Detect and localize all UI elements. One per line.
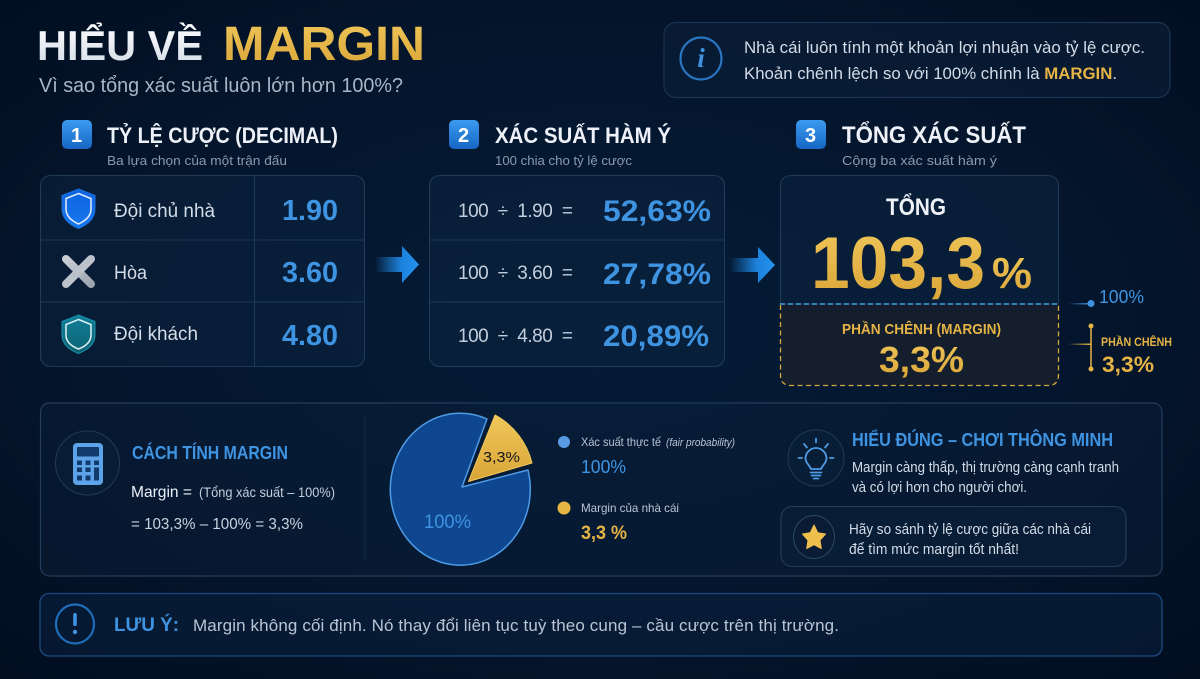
value: draw odds: 3.60 bbox=[282, 257, 338, 289]
panel: total probability bbox=[780, 176, 1060, 386]
explanation text: và có lợi hơn cho người chơi. bbox=[852, 480, 1027, 496]
result row 1: 52,63% bbox=[603, 195, 711, 228]
formula: Margin = bbox=[131, 484, 192, 501]
heading: understand, play smart: HIỂU ĐÚNG – CHƠI THÔNG MINH bbox=[852, 429, 1113, 450]
legend: fair probability: 100% bbox=[581, 457, 626, 477]
title: MARGIN bbox=[223, 18, 425, 71]
100% dashed line bbox=[780, 303, 1060, 305]
tip text: để tìm mức margin tốt nhất! bbox=[849, 542, 1019, 558]
title bbox=[37, 18, 425, 71]
marker: 100% level bbox=[1068, 287, 1144, 307]
info text: Nhà cái luôn tính một khoản lợi nhuận vào tỷ lệ cược. bbox=[744, 38, 1145, 57]
panel: implied probability bbox=[430, 176, 724, 366]
info text: Khoản chênh lệch so với 100% chính là MARGIN. bbox=[744, 64, 1117, 83]
legend: fair probability: Xác suất thực tế bbox=[581, 435, 661, 449]
legend: fair probability: (fair probability) bbox=[666, 437, 735, 449]
step 1 heading: 1 bbox=[71, 125, 82, 147]
tip text: Hãy so sánh tỷ lệ cược giữa các nhà cái bbox=[849, 522, 1091, 538]
pie chart: 3,3% bbox=[483, 449, 520, 466]
margin value: 3,3% bbox=[879, 339, 964, 380]
label: home team: Đội chủ nhà bbox=[114, 201, 215, 222]
panel: odds table bbox=[40, 176, 364, 366]
tip text bbox=[849, 522, 1091, 558]
legend: bookmaker margin: Margin của nhà cái bbox=[581, 501, 679, 515]
legend: bookmaker margin: 3,3 % bbox=[581, 523, 627, 544]
step 3 heading bbox=[796, 120, 1026, 168]
icon: away shield bbox=[62, 315, 95, 354]
tip box bbox=[781, 506, 1126, 566]
panel: calculation and chart bbox=[40, 403, 1162, 576]
legend: bookmaker margin bbox=[558, 501, 679, 544]
result row 3: 20,89% bbox=[603, 320, 709, 353]
explanation text bbox=[852, 460, 1119, 496]
formula row 1: 100 ÷ 1.90 = bbox=[458, 201, 573, 222]
icon: exclamation bbox=[56, 604, 94, 644]
arrow: step 1 to 2 bbox=[375, 246, 419, 283]
total value: % bbox=[992, 249, 1032, 298]
marker: margin bracket bbox=[1068, 324, 1172, 377]
result row 2: 27,78% bbox=[603, 258, 711, 291]
formula row 2: 100 ÷ 3.60 = bbox=[458, 263, 573, 284]
panel: note bbox=[40, 594, 1162, 656]
subtitle: Vì sao tổng xác suất luôn lớn hơn 100%? bbox=[39, 75, 403, 97]
total value: 103,3 bbox=[811, 223, 985, 304]
formula bbox=[131, 484, 335, 533]
formula: = 103,3% – 100% = 3,3% bbox=[131, 516, 303, 533]
pie chart: 100% bbox=[424, 512, 471, 533]
total label: TỔNG bbox=[886, 193, 946, 221]
value: away odds: 4.80 bbox=[282, 320, 338, 352]
step 2 heading: 100 chia cho tỷ lệ cược bbox=[495, 153, 633, 168]
icon: draw cross bbox=[66, 259, 91, 284]
step 1 heading bbox=[62, 120, 338, 168]
arrow: step 2 to 3 bbox=[730, 247, 775, 283]
icon: info bbox=[680, 38, 722, 80]
step 1 heading: Ba lựa chọn của một trận đấu bbox=[107, 153, 287, 168]
heading: how to calculate: CÁCH TÍNH MARGIN bbox=[132, 442, 288, 463]
icon: info: i bbox=[697, 43, 705, 73]
icon: light bulb bbox=[788, 430, 844, 486]
marker: margin bracket: 3,3% bbox=[1102, 352, 1154, 377]
label: away team: Đội khách bbox=[114, 324, 198, 345]
formula row 3: 100 ÷ 4.80 = bbox=[458, 326, 573, 347]
step 3 heading: Cộng ba xác suất hàm ý bbox=[842, 153, 998, 168]
panel: info callout bbox=[664, 22, 1170, 98]
step 2 heading bbox=[449, 120, 671, 168]
formula: (Tổng xác suất – 100%) bbox=[199, 485, 335, 500]
label: draw: Hòa bbox=[114, 263, 147, 284]
step 2 heading: XÁC SUẤT HÀM Ý bbox=[495, 123, 671, 148]
explanation text: Margin càng thấp, thị trường càng cạnh tranh bbox=[852, 460, 1119, 476]
icon: star bbox=[794, 516, 834, 558]
icon: home shield bbox=[62, 189, 95, 228]
step 2 heading: 2 bbox=[458, 125, 469, 147]
pie chart bbox=[390, 413, 532, 565]
info text bbox=[744, 38, 1145, 83]
step 3 heading: 3 bbox=[805, 125, 816, 147]
note text: Margin không cối định. Nó thay đổi liên tục tuỳ theo cung – cầu cược trên thị trường. bbox=[193, 616, 839, 635]
title: HIỂU VỀ bbox=[37, 21, 203, 69]
marker: margin bracket: PHẦN CHÊNH bbox=[1101, 334, 1172, 349]
legend: fair probability bbox=[558, 435, 735, 477]
step 1 heading: TỶ LỆ CƯỢC (DECIMAL) bbox=[107, 123, 338, 148]
note label: LƯU Ý: bbox=[114, 614, 179, 636]
step 3 heading: TỔNG XÁC SUẤT bbox=[842, 121, 1026, 149]
marker: 100% level: 100% bbox=[1099, 287, 1144, 307]
value: home odds: 1.90 bbox=[282, 195, 338, 227]
margin label: PHẦN CHÊNH (MARGIN) bbox=[842, 320, 1001, 338]
margin zone bbox=[780, 304, 1058, 386]
icon: calculator bbox=[56, 431, 120, 495]
